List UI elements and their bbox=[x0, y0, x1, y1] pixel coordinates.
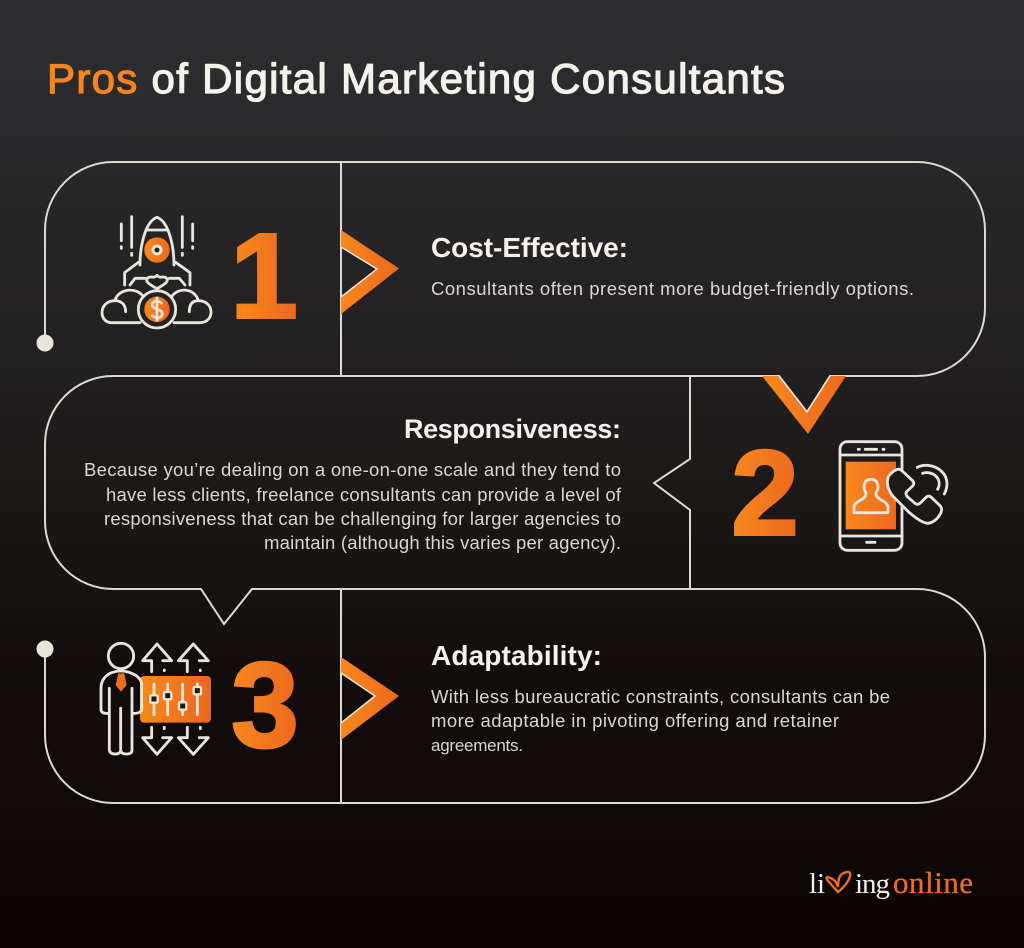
text block: Consultants often present more budget-friendly options. bbox=[431, 278, 914, 299]
text block bbox=[431, 686, 890, 755]
text block: more adaptable in pivoting offering and retainer bbox=[431, 710, 839, 731]
number 2: 2 bbox=[731, 424, 799, 560]
heading: Adaptability: bbox=[431, 640, 602, 671]
icon: leaf heart bbox=[827, 872, 850, 892]
icon: rocket with money bag bbox=[102, 217, 211, 328]
panel: adaptability bbox=[101, 636, 890, 772]
text block: Because you’re dealing on a one-on-one scale and they tend to bbox=[84, 459, 621, 480]
chevron bbox=[341, 230, 399, 314]
title: Pros of Digital Marketing Consultants bbox=[47, 55, 785, 102]
text block: With less bureaucratic constraints, consultants can be bbox=[431, 686, 890, 707]
panel: responsiveness bbox=[84, 376, 947, 560]
heading: Cost-Effective: bbox=[431, 232, 628, 263]
text block: responsiveness that can be challenging for larger agencies to bbox=[104, 508, 621, 529]
connector outline: panels bbox=[36, 162, 985, 803]
logo: online bbox=[893, 865, 973, 900]
text block: have less clients, freelance consultants can provide a level of bbox=[106, 484, 622, 505]
text block: maintain (although this varies per agency). bbox=[264, 532, 621, 553]
logo: li bbox=[809, 868, 825, 900]
text block: agreements. bbox=[431, 736, 523, 755]
chevron bbox=[762, 376, 846, 434]
number 1: 1 bbox=[230, 208, 298, 344]
icon: smartphone with call bbox=[840, 442, 947, 550]
panel: cost-effective bbox=[102, 208, 914, 344]
chevron bbox=[341, 657, 399, 740]
heading: Responsiveness: bbox=[404, 414, 621, 444]
text block bbox=[84, 459, 622, 553]
number 3: 3 bbox=[231, 636, 299, 772]
icon: man with control sliders bbox=[101, 643, 211, 754]
logo bbox=[809, 865, 973, 900]
logo: ing bbox=[855, 868, 890, 900]
